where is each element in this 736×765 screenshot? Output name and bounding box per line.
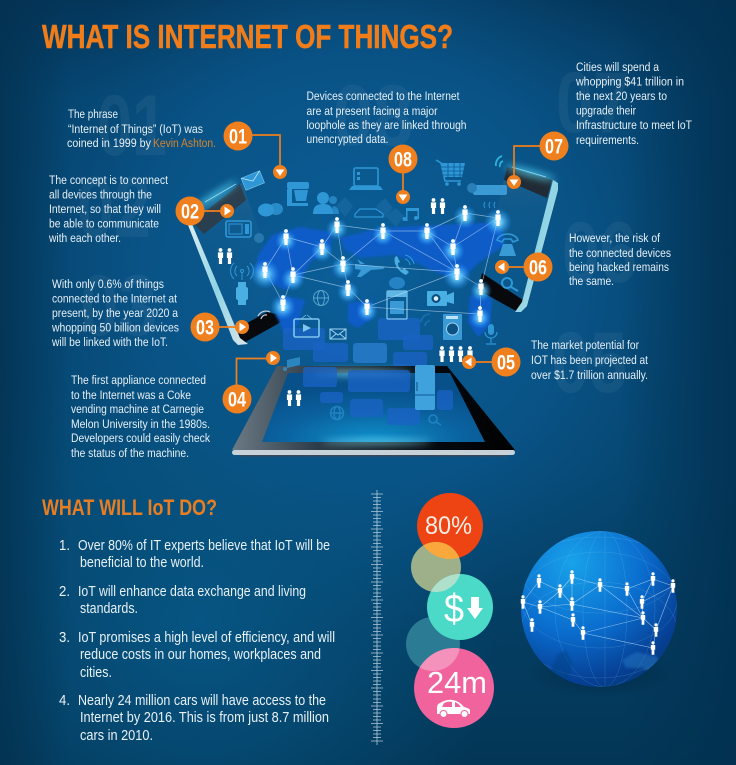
icon: magnifier right	[502, 278, 518, 291]
icon: blue dot tag	[254, 233, 264, 243]
list of benefits: 2.	[59, 584, 70, 600]
bubble: dark teal	[406, 617, 460, 671]
list of benefits: IoT promises a high level of efficiency, and will	[78, 630, 335, 646]
globe grid	[521, 531, 677, 687]
icon: camera	[427, 291, 454, 306]
icon: microphone	[485, 324, 497, 344]
callout 06	[495, 252, 552, 282]
text block: 06	[569, 231, 671, 288]
text block: 07: Cities will spend a	[576, 60, 659, 74]
list of benefits: beneficial to the world.	[80, 555, 204, 571]
icon: users	[313, 192, 339, 214]
icon: people left	[218, 248, 232, 264]
icon: laptop	[349, 168, 383, 190]
text block: 01: “Internet of Things” (IoT) was	[68, 122, 203, 136]
tablet app tiles	[303, 367, 453, 425]
text block: 04: to the Internet was a Coke	[71, 388, 191, 402]
text block: 04: Melon University in the 1980s.	[71, 417, 210, 431]
list of benefits: 1.	[59, 538, 70, 554]
ghost numerals: 01	[97, 78, 167, 174]
text block: 07: the next 20 years to	[576, 89, 667, 103]
text block: 08	[306, 89, 467, 146]
text block: 01: The phrase	[68, 107, 118, 121]
bubble: cost reduction	[427, 574, 493, 640]
text block: 01	[67, 107, 216, 150]
icon: globe on tablet	[330, 406, 344, 420]
text block: 02: with each other.	[48, 231, 121, 245]
callout 08	[388, 144, 418, 204]
text block: 03: connected to the Internet at	[52, 292, 177, 306]
globe people	[521, 570, 675, 655]
globe	[521, 531, 677, 698]
text block: 03: will be linked with the IoT.	[51, 335, 168, 349]
icon: wifi top right	[496, 156, 503, 167]
left phone	[188, 180, 290, 345]
callout 08: 08	[394, 148, 412, 172]
text block: 07	[575, 60, 692, 147]
icon: mixer	[287, 182, 309, 206]
globe continents	[551, 650, 659, 680]
list of benefits: Nearly 24 million cars will have access to the	[78, 693, 326, 709]
callout 03: 03	[196, 316, 214, 340]
bubble: 80 percent	[417, 493, 483, 559]
text block: 08: Devices connected to the Internet	[306, 89, 460, 103]
text block: 04: The first appliance connected	[71, 373, 206, 387]
ghost numerals: 05	[552, 315, 627, 411]
icon: wifi in left phone	[258, 311, 270, 319]
text block: 02: be able to communicate	[49, 216, 159, 230]
icon: oven	[387, 291, 407, 319]
icon: smart watch	[236, 282, 248, 305]
callout 06: 06	[529, 256, 547, 280]
icon: envelope top	[241, 171, 265, 190]
text block: 02: Internet, so that they will	[49, 202, 161, 216]
icon: globe	[314, 290, 328, 306]
text block: 05: The market potential for	[531, 338, 639, 352]
icon: music near tablet	[283, 357, 300, 371]
bubble: olive overlap	[411, 542, 461, 592]
callout 01	[224, 122, 287, 179]
icon: chat bubbles	[258, 203, 283, 216]
callout 04	[222, 351, 280, 414]
list of benefits: 4.	[59, 693, 70, 709]
icon: fridge	[415, 365, 435, 410]
list of benefits	[59, 538, 335, 744]
icon: handset with signal	[394, 255, 414, 275]
text block: 08: loophole as they are linked through	[306, 118, 467, 132]
icon: envelope lower	[330, 329, 346, 339]
callout 02	[176, 196, 234, 226]
list of benefits: cities.	[80, 665, 112, 681]
text block: 03: With only 0.6% of things	[52, 277, 164, 291]
callout 04: 04	[228, 388, 246, 412]
callout 01: 01	[229, 126, 247, 148]
list of benefits: IoT will enhance data exchange and living	[78, 584, 306, 600]
icon: microwave	[226, 221, 251, 237]
icon: people on tablet	[287, 390, 301, 406]
icon: telephone	[497, 234, 518, 256]
text block: 02: all devices through the	[49, 188, 152, 202]
icon: music note	[402, 208, 419, 221]
callout 07: 07	[545, 136, 563, 158]
ghost numerals: 08	[333, 68, 413, 164]
list of benefits: Internet by 2016. This is from just 8.7 million	[80, 710, 329, 726]
text block: 08: unencrypted data.	[306, 132, 388, 146]
text block: 04	[71, 373, 211, 460]
title: WHAT IS INTERNET OF THINGS?	[42, 18, 453, 55]
text block: 06: the same.	[569, 274, 614, 288]
ghost numerals: 07	[556, 55, 630, 151]
text block: 04: vending machine at Carnegie	[71, 402, 204, 416]
text block: 05: over $1.7 trillion annually.	[531, 368, 648, 382]
callout 07	[507, 132, 568, 189]
callout 02: 02	[181, 200, 199, 224]
world map	[255, 222, 505, 337]
text block: 01: coined in 1999 by	[67, 136, 152, 150]
icon: washer	[443, 314, 462, 340]
icon: wifi lower	[421, 314, 430, 326]
text block: 06: However, the risk of	[569, 231, 660, 245]
icon: car	[437, 700, 470, 718]
ghost numerals: 03	[80, 258, 157, 354]
icon: magnifier on tablet	[429, 415, 441, 425]
text block: 02	[48, 173, 168, 245]
list of benefits: reduce costs in our homes, workplaces and	[80, 647, 321, 663]
text block: 04: the status of the machine.	[71, 446, 189, 460]
list of benefits: standards.	[80, 601, 138, 617]
icons around the network	[218, 156, 518, 371]
callout 05	[462, 348, 520, 376]
bubble: 80 percent: 80%	[425, 512, 472, 540]
floating app tiles	[283, 318, 433, 367]
stat bubbles	[406, 493, 494, 728]
icon: people top right	[431, 198, 445, 214]
ghost numerals	[77, 55, 637, 411]
right phone	[478, 164, 558, 312]
bubble: cost reduction: $	[444, 587, 464, 631]
text block: 05	[531, 338, 648, 382]
callout 05: 05	[497, 352, 515, 374]
icon: hexagons and car	[336, 197, 404, 227]
icon: plane	[355, 259, 385, 277]
callout 03	[190, 312, 249, 342]
tablet	[232, 365, 515, 456]
text block: 03: whopping 50 billion devices	[51, 320, 179, 334]
icon: antenna	[231, 263, 253, 280]
icon: four people	[439, 346, 473, 362]
icon: cart	[436, 160, 465, 186]
icon: air conditioner	[467, 183, 507, 208]
text block: 07: whopping $41 trillion in	[575, 74, 684, 88]
list of benefits: cars in 2010.	[80, 728, 153, 744]
text block: 06: the connected devices	[569, 246, 671, 260]
text block: 03	[51, 277, 179, 349]
ghost numerals: 02	[77, 160, 151, 256]
globe network	[523, 577, 673, 648]
heading: what will IoT do: WHAT WILL IoT DO?	[42, 495, 217, 520]
text block: 02: The concept is to connect	[49, 173, 168, 187]
text block: 07: Infrastructure to meet IoT	[576, 118, 692, 132]
text block: 07: requirements.	[576, 133, 639, 147]
text block: 08: are at present facing a major	[306, 104, 438, 118]
text block: 03: present, by the year 2020 a	[52, 306, 178, 320]
text block: 06: being hacked remains	[569, 260, 669, 274]
ruler divider	[371, 490, 383, 745]
icon: glow dot over oven	[389, 277, 405, 289]
list of benefits: Over 80% of IT experts believe that IoT will be	[78, 538, 330, 554]
network connections	[265, 213, 498, 314]
icon: television	[294, 315, 319, 337]
text block: 04: Developers could easily check	[71, 431, 211, 445]
bubble: 24 million cars: 24m	[427, 665, 487, 700]
bubble: 24 million cars	[414, 648, 494, 728]
text block: 01: Kevin Ashton.	[153, 136, 216, 150]
text block: 05: IOT has been projected at	[531, 353, 648, 367]
text block: 07: upgrade their	[576, 104, 636, 118]
ghost numerals: 06	[562, 205, 637, 301]
list of benefits: 3.	[59, 630, 70, 646]
network nodes	[250, 205, 512, 329]
